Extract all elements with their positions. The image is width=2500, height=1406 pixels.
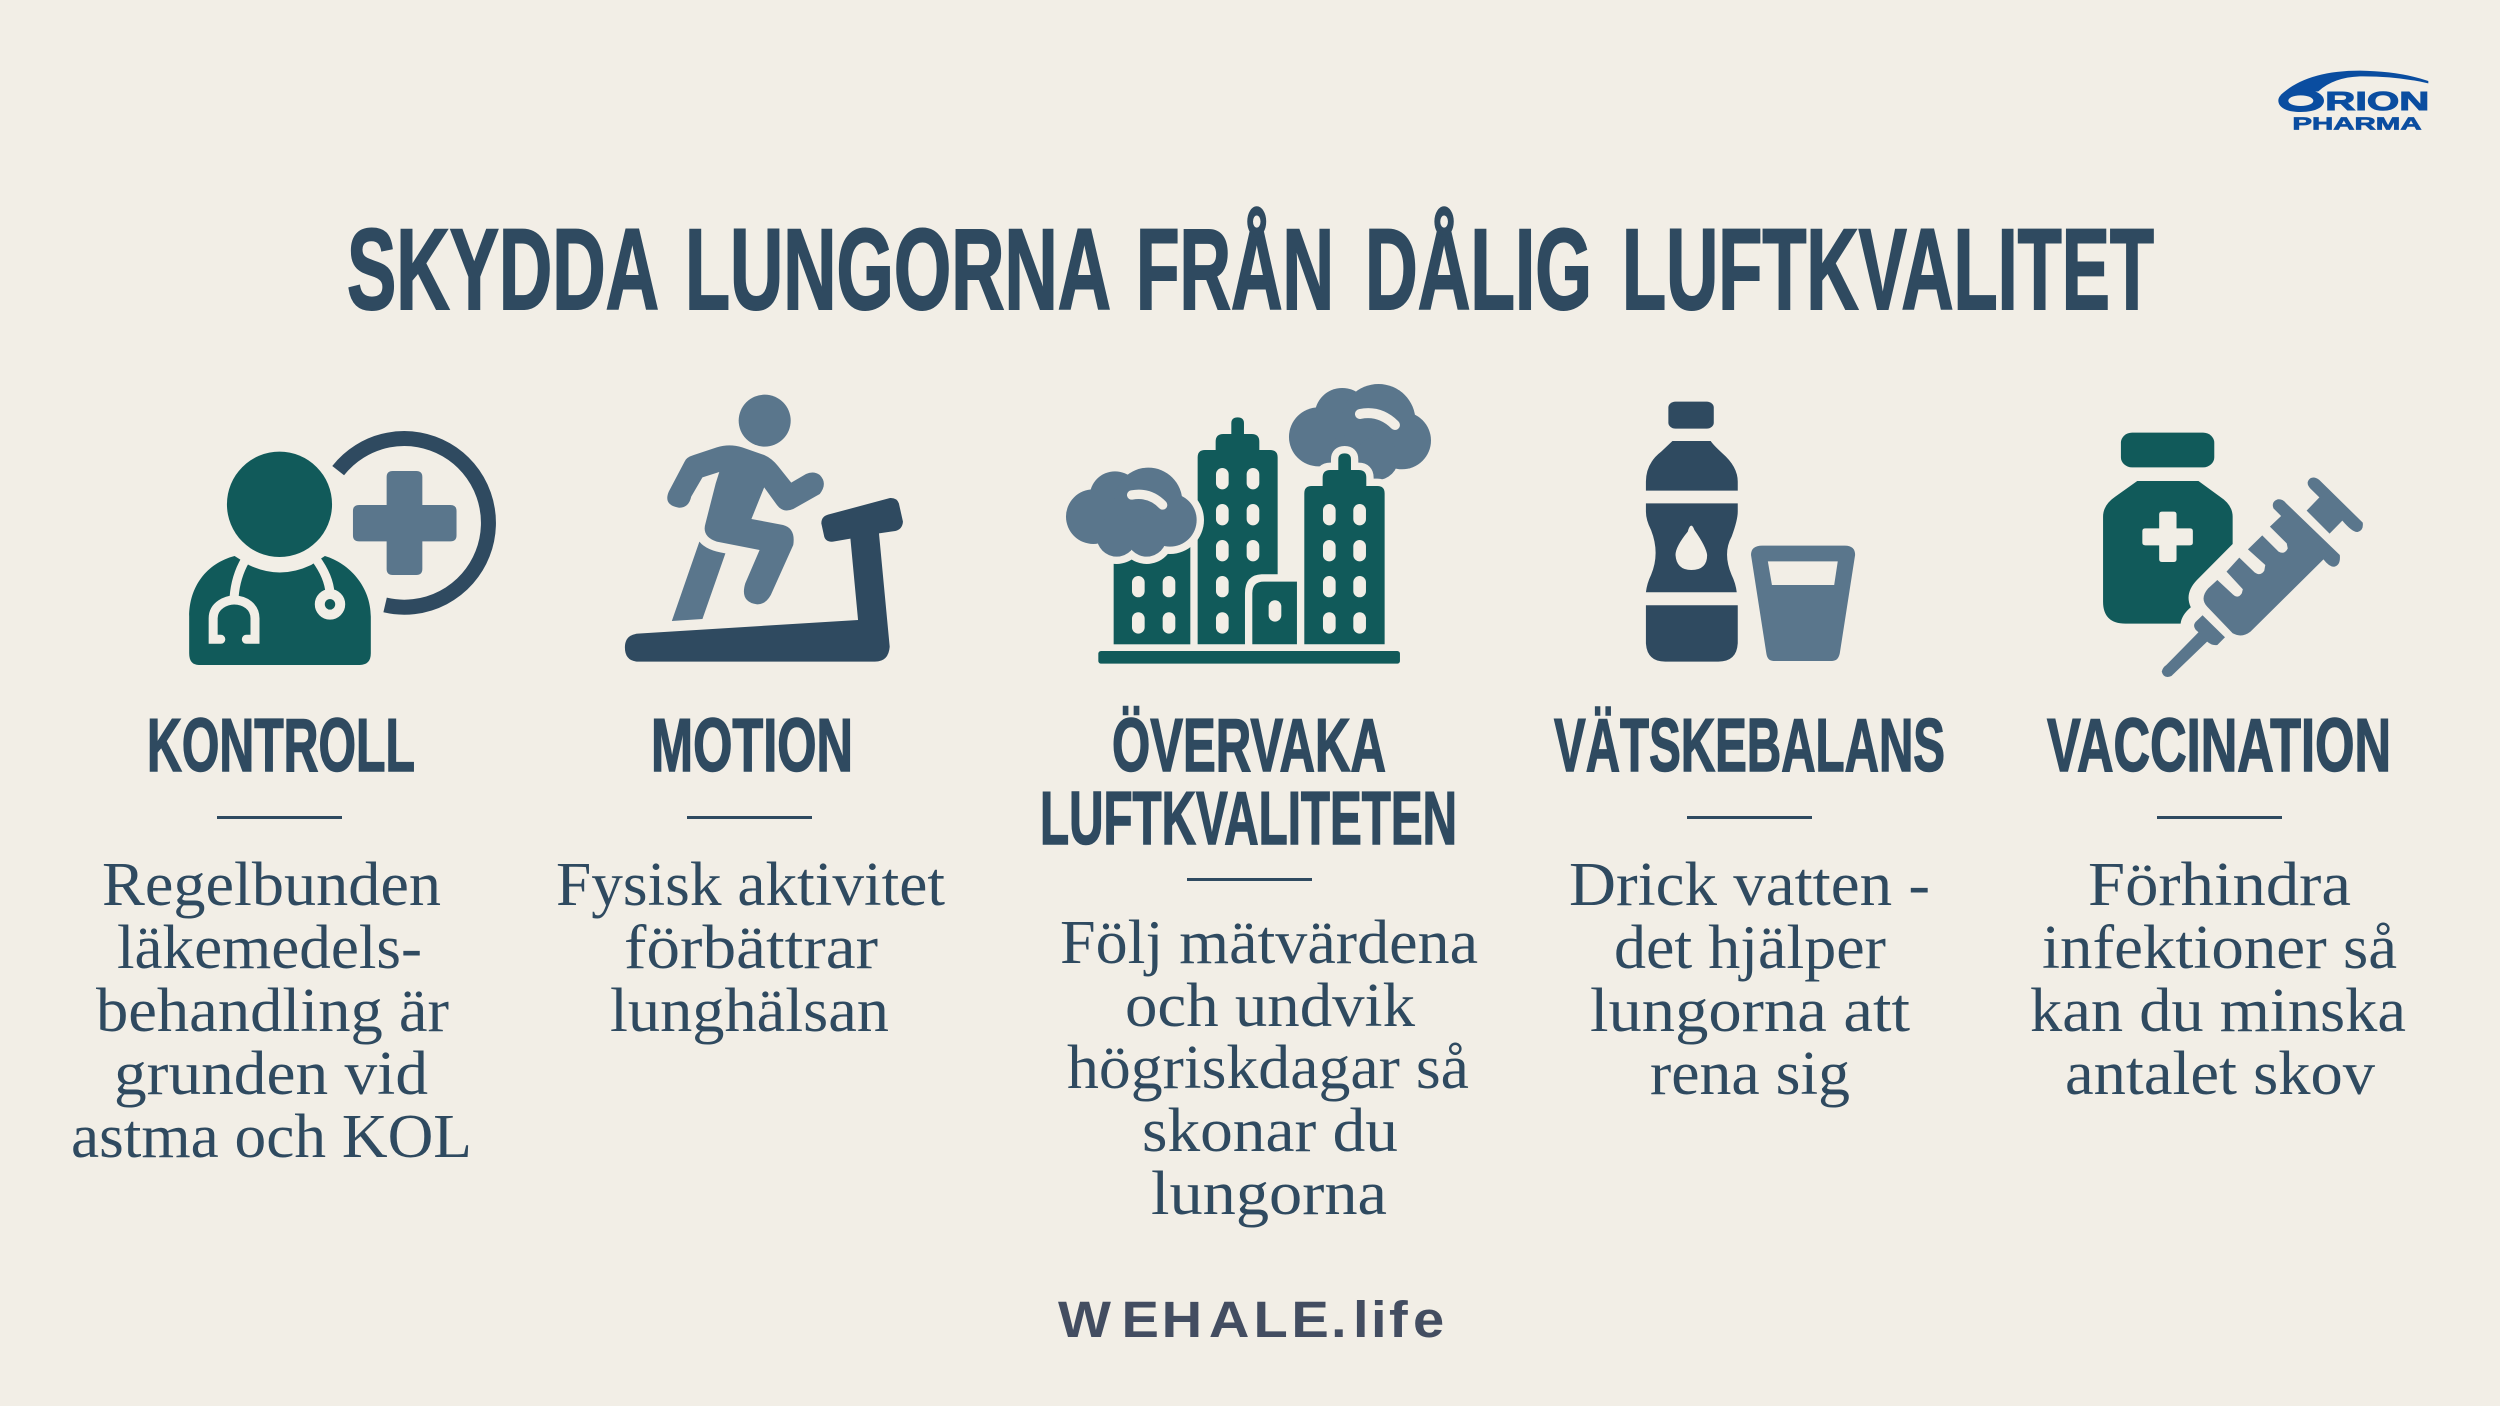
text block: vätskebalans [1569,851,1930,1108]
text block: motion: lunghälsan [610,977,889,1045]
text block: kontroll: läkemedels- [117,914,422,982]
text block: övervaka: och undvik [1125,972,1415,1040]
title: DÅLIG [1365,206,1592,334]
icon: runner on treadmill [625,395,903,662]
text block: kontroll: grunden vid [114,1040,428,1108]
logo: Orion Pharma [2278,71,2429,134]
text block: motion [556,851,945,1045]
text block: vätskebalans: rena sig [1650,1040,1850,1108]
divider: kontroll [217,816,342,819]
text block: övervaka: lungorna [1151,1160,1387,1228]
text block: övervaka [1060,909,1478,1228]
title: FRÅN [1136,206,1334,334]
icon: medicine vial and syringe [2103,433,2363,677]
text block: motion: Fysisk aktivitet [556,851,945,919]
heading: övervaka luftkvaliteten: LUFTKVALITETEN [1040,776,1457,860]
divider: övervaka [1187,878,1312,881]
text block: kontroll [71,851,472,1171]
icon: doctor with medical cross [189,439,488,665]
icon: city with smog clouds [1059,384,1431,664]
divider: motion [687,816,812,819]
panel: vätskebalans [1554,402,1945,1108]
heading: vätskebalans: VÄTSKEBALANS [1554,703,1945,787]
text block: övervaka: högriskdagar så [1067,1034,1469,1102]
logo: Orion Pharma: PHARMA [2292,114,2422,134]
text block: vätskebalans: Drick vatten - [1569,851,1930,919]
text block: vaccination [2030,851,2406,1108]
text block: vaccination: Förhindra [2088,851,2351,919]
title: LUFTKVALITET [1622,206,2154,334]
heading: övervaka luftkvaliteten [1040,703,1457,860]
divider: vaccination [2157,816,2282,819]
footer: WEHALE.life: WEHALE.life [1058,1291,1444,1348]
text block: vätskebalans: det hjälper [1614,914,1886,982]
heading: kontroll: KONTROLL [147,703,415,787]
text block: övervaka: Följ mätvärdena [1060,909,1478,977]
text block: kontroll: astma och KOL [71,1103,472,1171]
logo: Orion Pharma: RION [2325,86,2429,116]
divider: vätskebalans [1687,816,1812,819]
icon: water bottle and glass [1646,402,1855,662]
text block: vaccination: antalet skov [2065,1040,2375,1108]
heading: övervaka luftkvaliteten: ÖVERVAKA [1112,703,1386,787]
panel: övervaka luftkvaliteten [1040,384,1478,1228]
text block: vaccination: kan du minska [2030,977,2406,1045]
panel: motion [556,395,945,1045]
text block: kontroll: behandling är [96,977,449,1045]
text block: kontroll: Regelbunden [102,851,441,919]
title: LUNGORNA [685,206,1111,334]
title [347,206,2154,334]
heading: motion: MOTION [651,703,853,787]
panel: kontroll [71,439,488,1171]
text block: vätskebalans: lungorna att [1590,977,1910,1045]
text block: övervaka: skonar du [1142,1097,1398,1165]
panel: vaccination [2030,433,2406,1108]
text block: vaccination: infektioner så [2042,914,2397,982]
text block: motion: förbättrar [624,914,878,982]
title: SKYDDA [347,206,659,334]
